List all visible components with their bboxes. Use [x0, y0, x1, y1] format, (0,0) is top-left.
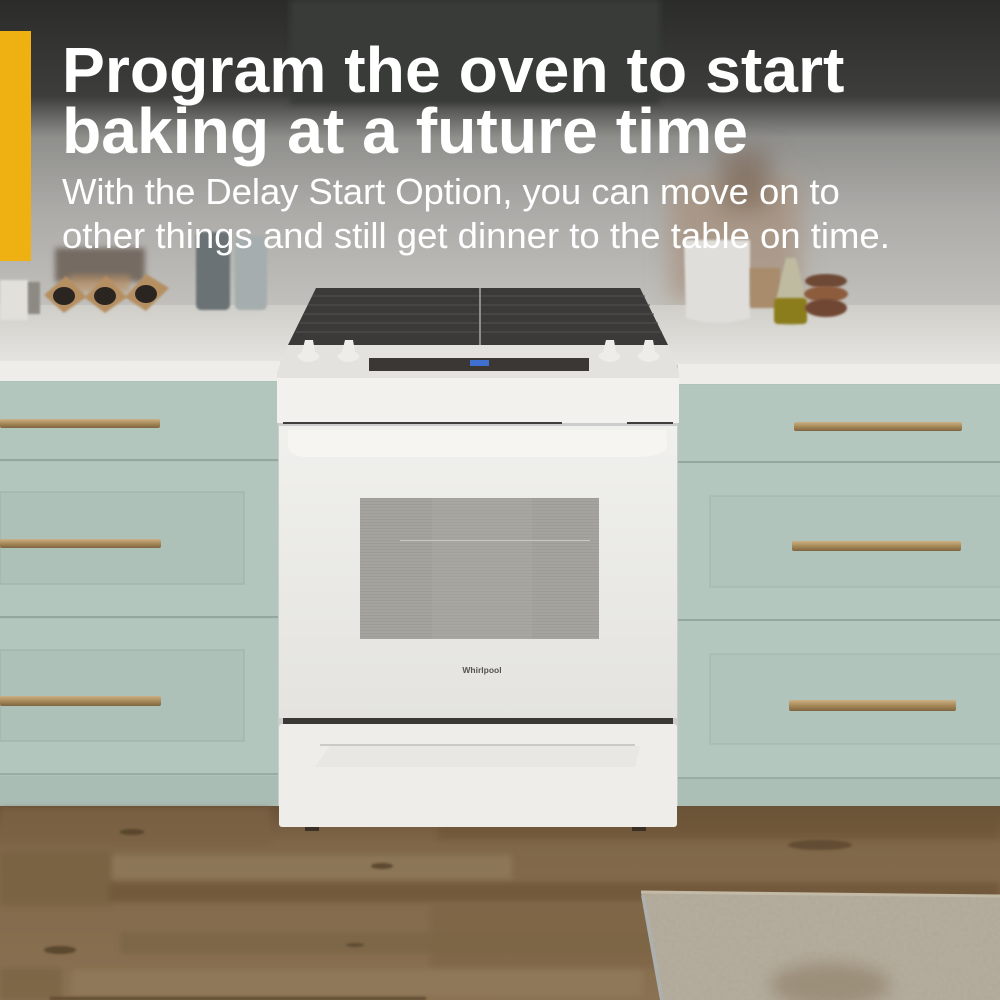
subtitle text	[62, 171, 890, 256]
oven window	[360, 498, 599, 639]
title	[62, 34, 844, 166]
cooktop grates	[288, 288, 668, 345]
countertop	[0, 305, 1000, 365]
brand logo: Whirlpool	[462, 665, 502, 675]
title: Program the oven to start	[62, 34, 844, 106]
oven door	[279, 426, 677, 718]
countertop items: right side	[684, 240, 848, 325]
cabinets right	[678, 384, 1000, 812]
storage drawer	[279, 724, 677, 827]
drawer gap	[283, 718, 673, 724]
knobs	[298, 340, 660, 362]
upper body	[277, 378, 679, 423]
cabinets left	[0, 381, 278, 807]
subtitle text: With the Delay Start Option, you can move on to	[62, 171, 840, 212]
oven	[277, 288, 679, 831]
rug	[641, 890, 1000, 1000]
control panel deck	[277, 345, 679, 384]
wall	[0, 0, 1000, 320]
title: baking at a future time	[62, 94, 748, 166]
subtitle text: other things and still get dinner to the table on time.	[62, 215, 890, 256]
accent bar	[0, 31, 31, 261]
wood floor	[0, 806, 1000, 1000]
countertop items: spice rack	[0, 232, 267, 320]
door handle	[288, 430, 667, 457]
